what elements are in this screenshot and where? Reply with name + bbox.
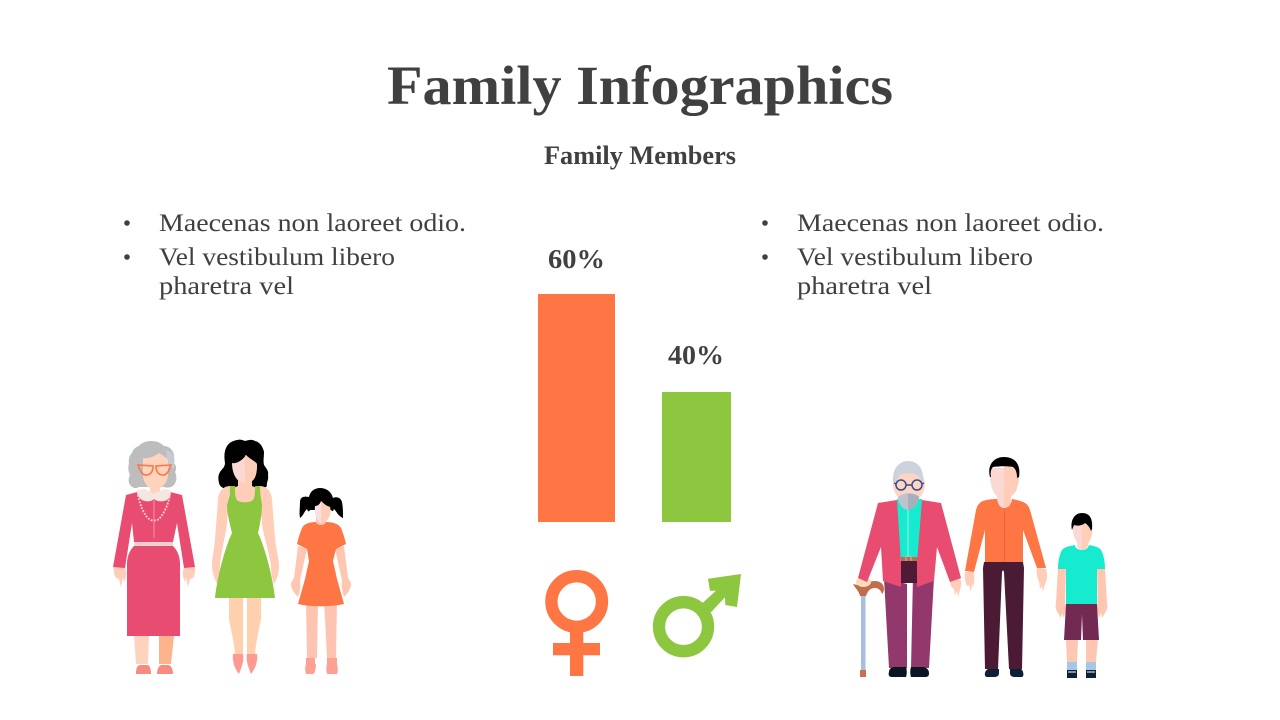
- father hands: [965, 568, 1047, 592]
- father trousers: [983, 562, 1024, 669]
- father shoes: [985, 669, 1023, 677]
- male bar: [662, 392, 731, 522]
- grandmother jacket: [113, 492, 195, 568]
- boy shoes: [1067, 670, 1096, 678]
- grandfather cane: [853, 581, 884, 677]
- girl legs: [306, 600, 337, 658]
- mother neck and chest: [233, 478, 257, 505]
- boy legs: [1066, 640, 1098, 662]
- left bullet list: [124, 208, 466, 300]
- boy shorts: [1064, 604, 1099, 640]
- grandfather jacket: [858, 500, 961, 587]
- female value label: 60%: [548, 244, 605, 274]
- mother face: [232, 455, 257, 483]
- right bullet list: pharetra vel: [797, 271, 932, 300]
- grandmother collar: [137, 489, 171, 501]
- title: Family Infographics: [387, 55, 893, 116]
- grandmother hair: [128, 441, 176, 488]
- grandmother legs: [134, 636, 149, 664]
- illustration: boy: [1056, 513, 1107, 678]
- grandfather hand on cane: [856, 577, 871, 587]
- grandfather waist: [901, 561, 917, 583]
- boy hair: [1071, 513, 1092, 531]
- bar chart: female and male share: [538, 244, 731, 522]
- girl neck: [316, 514, 326, 528]
- grandmother pearl necklace: [138, 495, 170, 520]
- subtitle: Family Members: [544, 141, 736, 170]
- boy arms: [1056, 568, 1107, 618]
- right bullet list: [762, 208, 1104, 300]
- grandmother hands: [114, 566, 195, 587]
- boy t-shirt: [1058, 545, 1105, 604]
- grandfather hair: [893, 461, 923, 482]
- female bar: [538, 294, 615, 522]
- mother shoes: [233, 654, 257, 674]
- mother dress: [215, 486, 275, 598]
- grandfather shirt: [897, 499, 922, 559]
- illustration: grandfather: [853, 461, 961, 677]
- illustration: mother: [212, 440, 279, 674]
- illustration: grandmother: [113, 441, 195, 674]
- illustration: girl: [291, 488, 351, 674]
- icon: male symbol: [659, 574, 741, 651]
- grandfather beard: [898, 493, 919, 510]
- grandfather head: [893, 471, 925, 500]
- icon: female symbol: [551, 576, 602, 676]
- grandfather trousers: [884, 576, 934, 668]
- right bullet list: Vel vestibulum libero: [797, 242, 1033, 271]
- mother legs: [229, 598, 261, 655]
- illustration: father: [965, 457, 1047, 677]
- girl hair and pigtails: [300, 488, 343, 518]
- grandmother glasses: [138, 465, 171, 475]
- left bullet list: pharetra vel: [159, 271, 294, 300]
- grandmother skirt: [127, 546, 180, 636]
- girl shoes: [305, 658, 338, 674]
- left bullet list: Maecenas non laoreet odio.: [159, 208, 466, 237]
- boy head: [1073, 522, 1092, 550]
- grandmother face and neck: [143, 453, 168, 496]
- father hair: [989, 457, 1019, 478]
- father shirt: [965, 499, 1046, 572]
- boy socks: [1067, 662, 1096, 670]
- left bullet list: Vel vestibulum libero: [159, 242, 395, 271]
- male value label: 40%: [668, 340, 724, 370]
- mother arms: [212, 486, 279, 584]
- father head: [990, 468, 1019, 508]
- grandmother zipper: [153, 500, 155, 538]
- right bullet list: Maecenas non laoreet odio.: [797, 208, 1104, 237]
- girl dress: [297, 522, 346, 606]
- grandfather shoes: [889, 667, 929, 677]
- grandmother belt: [134, 542, 173, 546]
- mother hair: [218, 440, 268, 491]
- grandfather right hand: [950, 578, 961, 597]
- grandfather belt: [901, 556, 918, 562]
- girl face: [315, 501, 330, 523]
- grandfather glasses: [894, 480, 924, 490]
- girl arms: [291, 546, 351, 597]
- grandmother shoes: [136, 665, 173, 674]
